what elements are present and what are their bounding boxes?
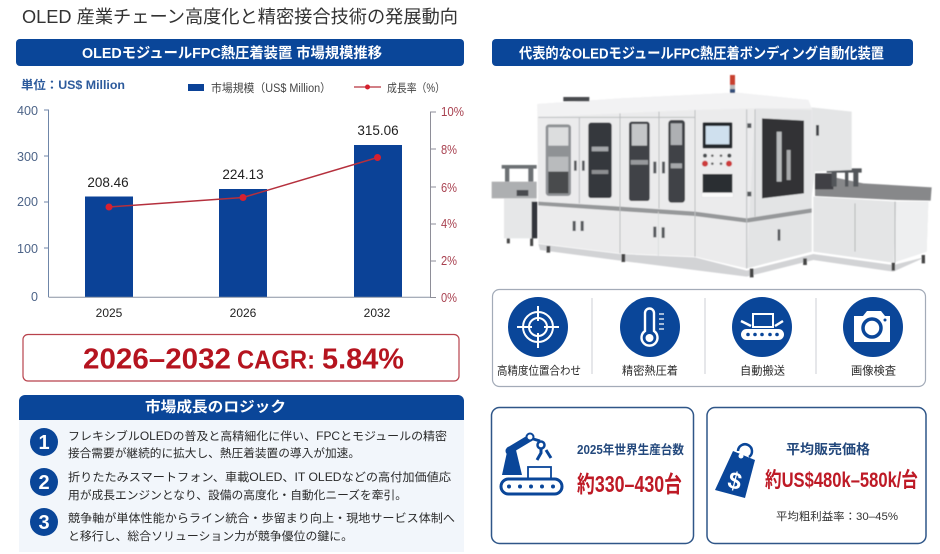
year labels: 2032 bbox=[364, 306, 391, 320]
icon: thermometer bbox=[620, 297, 680, 357]
production heading: 2025年世界生産台数 bbox=[577, 442, 684, 457]
icon: alignment target bbox=[508, 297, 568, 357]
left axis: 400 bbox=[17, 104, 38, 118]
baseline bbox=[48, 296, 430, 298]
machine body bbox=[537, 93, 812, 268]
legend: 市場規模（US$ Million） bbox=[211, 81, 331, 95]
logic item 2 bbox=[30, 468, 452, 502]
left axis: 0 bbox=[31, 290, 38, 304]
year labels: 2026 bbox=[230, 306, 257, 320]
year labels: 2025 bbox=[96, 306, 123, 320]
logic item 2: 折りたたみスマートフォン、車載OLED、IT OLEDなどの高付加価値応 bbox=[68, 470, 452, 484]
icon: robot arm on conveyor bbox=[501, 434, 562, 494]
illustration: bonding machine bbox=[492, 75, 932, 277]
production value: 約330–430台 bbox=[577, 471, 682, 497]
logic item 1 bbox=[30, 428, 448, 460]
equipment heading bbox=[492, 39, 913, 66]
right axis: 8% bbox=[441, 143, 457, 157]
logic heading: 市場成長のロジック bbox=[145, 398, 286, 416]
chart heading: OLEDモジュールFPC熱圧着装置 市場規模推移 bbox=[82, 44, 382, 62]
machine feet bbox=[548, 246, 805, 277]
right axis bbox=[430, 105, 464, 305]
chart heading bbox=[16, 39, 464, 66]
logic item 3: 3 bbox=[38, 512, 50, 534]
right axis: 2% bbox=[441, 254, 457, 268]
logic item 3: 競争軸が単体性能からライン統合・歩留まり向上・現地サービス体制へ bbox=[68, 511, 455, 525]
price heading: 平均販売価格 bbox=[786, 441, 871, 457]
panel: market growth logic bbox=[19, 395, 464, 552]
callout: CAGR: 5.84% bbox=[322, 344, 404, 376]
rear cabinet bbox=[812, 107, 852, 197]
bar value labels: 224.13 bbox=[222, 167, 264, 182]
right axis: 10% bbox=[441, 105, 464, 119]
technology labels: 高精度位置合わせ bbox=[497, 364, 581, 378]
bar value labels: 208.46 bbox=[87, 175, 129, 190]
logic item 1: フレキシブルOLEDの普及と高精細化に伴い、FPCとモジュールの精密 bbox=[68, 429, 448, 443]
icon: price tag bbox=[715, 444, 755, 498]
left conveyor bbox=[492, 165, 537, 246]
door handles bbox=[573, 123, 780, 241]
icon: price tag: $ bbox=[725, 467, 745, 496]
control buttons bbox=[702, 154, 732, 167]
right axis: 6% bbox=[441, 181, 457, 195]
right axis: 4% bbox=[441, 217, 457, 231]
logic heading bbox=[19, 395, 464, 420]
technology labels: 自動搬送 bbox=[740, 364, 785, 378]
callout: CAGR: 2026–2032 bbox=[83, 344, 231, 376]
unit label: 単位：US$ Million bbox=[21, 77, 125, 92]
panel: market size chart bbox=[16, 39, 464, 320]
technology labels bbox=[497, 364, 896, 378]
callout: CAGR: CAGR: bbox=[237, 344, 315, 374]
logic item 1: 接合需要が継続的に拡大し、熱圧着装置の導入が加速。 bbox=[68, 446, 360, 460]
icon: conveyor bbox=[732, 297, 792, 357]
touch screen bbox=[703, 122, 732, 148]
equipment heading: 代表的なOLEDモジュールFPC熱圧着ボンディング自動化装置 bbox=[519, 44, 884, 62]
technology labels: 精密熱圧着 bbox=[622, 364, 678, 378]
year labels bbox=[96, 306, 391, 320]
callout: CAGR bbox=[23, 334, 459, 381]
loading slot bbox=[702, 174, 733, 197]
right conveyor bbox=[813, 168, 932, 271]
logic item 3: と移行し、総合ソリューション力が競争優位の鍵に。 bbox=[68, 529, 353, 543]
logic item 2: 2 bbox=[38, 472, 50, 494]
panel: key technologies bbox=[492, 290, 926, 386]
logic item 1: 1 bbox=[38, 432, 50, 454]
left axis: 200 bbox=[17, 195, 38, 209]
technology labels: 画像検査 bbox=[851, 364, 896, 378]
legend: 成長率（%） bbox=[387, 82, 445, 95]
growth rate line bbox=[106, 154, 381, 210]
icon: camera bbox=[843, 297, 903, 357]
ground shadow bbox=[538, 244, 927, 277]
panel: average selling price bbox=[707, 408, 926, 544]
bar value labels: 315.06 bbox=[357, 123, 399, 138]
bar value labels bbox=[87, 123, 399, 190]
panel: production volume bbox=[492, 408, 694, 544]
title: OLED 産業チェーン高度化と精密接合技術の発展動向 bbox=[22, 7, 458, 27]
gross margin: 平均粗利益率：30–45% bbox=[776, 509, 898, 523]
left axis: 300 bbox=[17, 150, 38, 164]
legend bbox=[188, 81, 445, 95]
machine windows bbox=[546, 118, 804, 203]
left axis: 100 bbox=[17, 242, 38, 256]
signal tower bbox=[730, 75, 735, 93]
right axis: 0% bbox=[441, 291, 457, 305]
left axis bbox=[17, 104, 48, 304]
logic item 2: 用が成長エンジンとなり、設備の高度化・自動化ニーズを牽引。 bbox=[68, 488, 407, 502]
logic item 3 bbox=[30, 508, 455, 543]
bar chart bbox=[85, 145, 402, 297]
